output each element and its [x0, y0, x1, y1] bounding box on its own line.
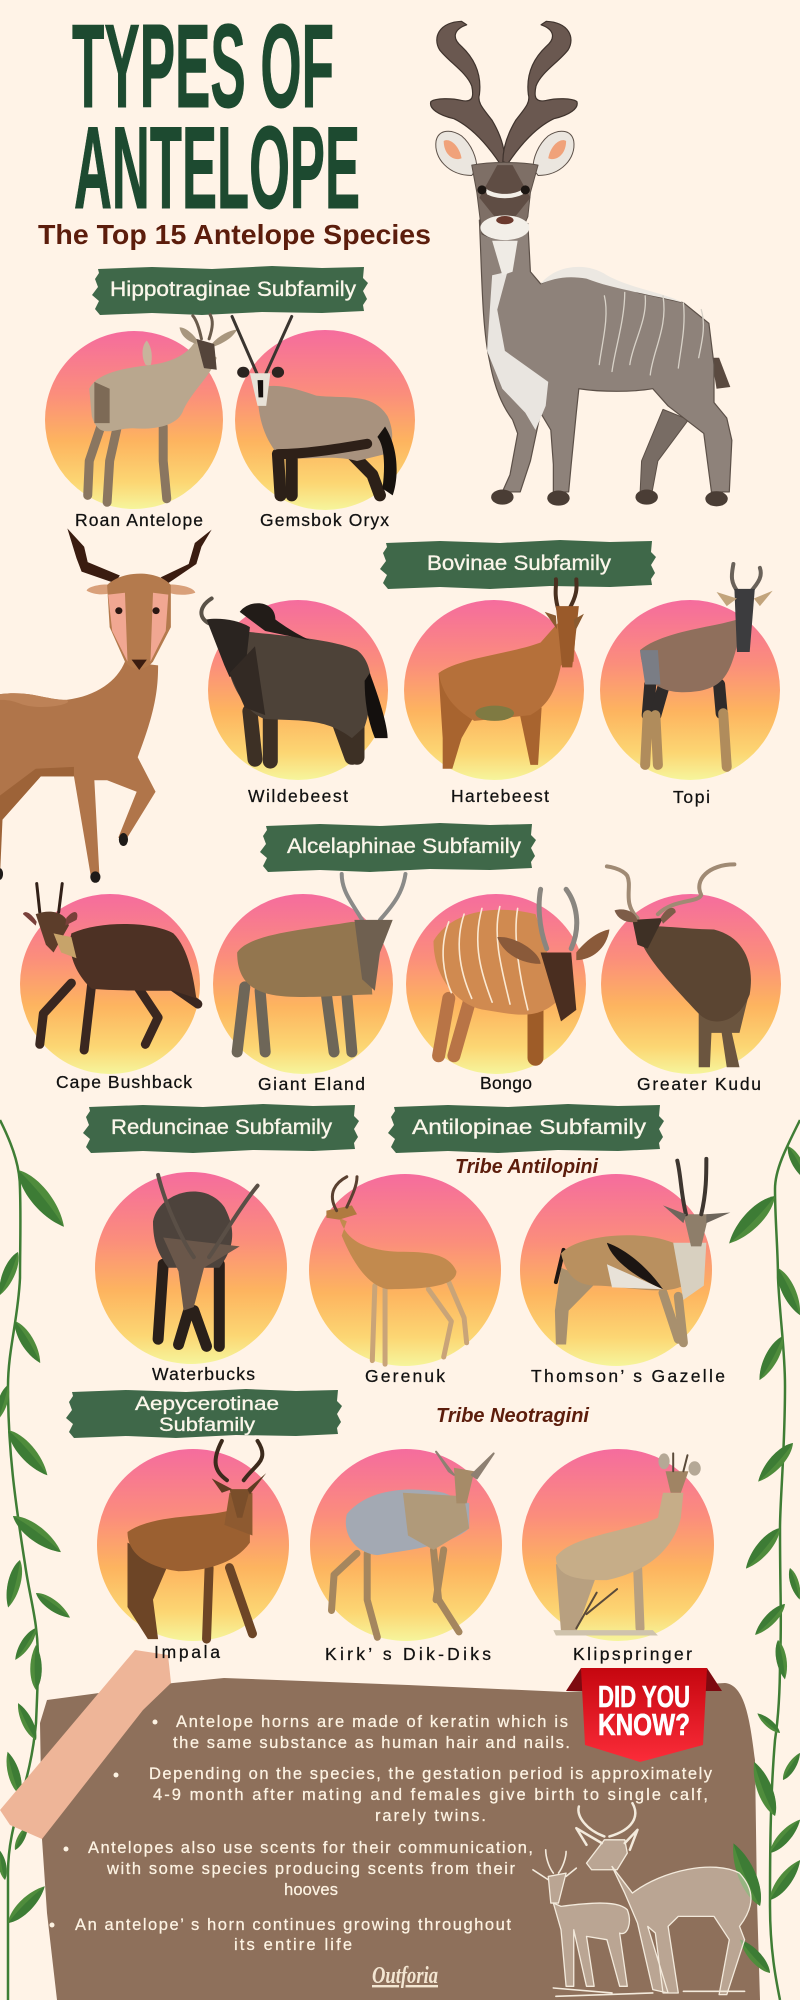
photo: waterbuck [153, 1175, 258, 1346]
infographic canvas: TYPES OF [72, 0, 334, 133]
photo: kirk's dik-dik [332, 1452, 494, 1637]
photo: hartebeest [439, 579, 584, 769]
fact: horn growth [50, 1916, 511, 1954]
photo: thomson's gazelle [555, 1159, 730, 1345]
title [72, 0, 360, 233]
banner: Alcelaphinae Subfamily: Alcelaphinae Subfamily [287, 834, 521, 858]
logo: Outforia: Outforia [372, 1963, 438, 1989]
photo: cape bushback [23, 884, 198, 1050]
fact: scents [64, 1839, 533, 1899]
photo: klipspringer [553, 1453, 701, 1636]
subheading: Tribe Neotragini: Tribe Neotragini [436, 1405, 589, 1427]
fact: gestation: 4-9 month after mating and females give birth to single calf, [153, 1786, 708, 1804]
infographic canvas: ANTELOPE [74, 102, 360, 233]
photo: giant eland [237, 874, 405, 1052]
label: Giant Eland: Giant Eland [258, 1074, 365, 1094]
label: Gemsbok Oryx: Gemsbok Oryx [260, 510, 389, 530]
fact: scents: hooves [284, 1881, 338, 1899]
label: Bongo: Bongo [480, 1073, 532, 1093]
illustration: greater kudu [431, 21, 732, 506]
banner: Bovinae Subfamily: Bovinae Subfamily [427, 551, 611, 575]
circle: wildebeest [208, 600, 388, 780]
subheading: Tribe Antilopini: Tribe Antilopini [455, 1156, 598, 1178]
illustration: line-art antelopes [533, 1803, 751, 1996]
label: Hartebeest: Hartebeest [451, 786, 549, 806]
photo: gerenuk [326, 1177, 467, 1364]
circle: thomson's gazelle [520, 1174, 712, 1366]
photo: topi [640, 564, 773, 767]
panel: did you know background [40, 1678, 760, 2000]
label: Klipspringer: Klipspringer [573, 1644, 692, 1664]
photo: roan antelope [88, 315, 237, 502]
fact: keratin: Antelope horns are made of keratin which is [176, 1713, 568, 1731]
banner: Aepycerotinae Subfamily [66, 1389, 342, 1438]
circle: gemsbok [235, 330, 415, 510]
banner: Bovinae Subfamily [380, 540, 656, 589]
fact: gestation: Depending on the species, the gestation period is approximately [149, 1765, 713, 1783]
label: Thomson's Gazelle: Thomson’ s Gazelle [531, 1366, 725, 1386]
badge: did you know [566, 1668, 722, 1762]
circle: klipspringer [522, 1449, 714, 1641]
photo: greater kudu [607, 864, 751, 1067]
label: Impala: Impala [154, 1642, 220, 1662]
banner: Antilopinae Subfamily: Antilopinae Subfamily [412, 1115, 646, 1139]
subtitle: The Top 15 Antelope Species [38, 219, 431, 250]
vine: right [723, 1120, 800, 2000]
label: Wildebeest: Wildebeest [248, 786, 348, 806]
banner: Alcelaphinae Subfamily [260, 823, 536, 872]
vine: left [0, 1120, 73, 2000]
circle: waterbuck [95, 1172, 287, 1364]
section: Reduncinae and Antilopinae [83, 1104, 730, 1386]
banner: Reduncinae Subfamily: Reduncinae Subfamily [111, 1115, 332, 1139]
circle: greater kudu [601, 894, 781, 1074]
badge: did you know: DID YOU [598, 1679, 690, 1714]
circle: hartebeest [404, 600, 584, 780]
fact: keratin: the same substance as human hair and nails. [173, 1734, 570, 1752]
photo: gemsbok oryx [232, 316, 397, 495]
label: Kirk's Dik-Diks: Kirk’ s Dik-Diks [325, 1644, 491, 1664]
label: Cape Bushback: Cape Bushback [56, 1072, 192, 1092]
banner: Aepycerotinae Subfamily: Subfamily [159, 1415, 256, 1436]
label: Gerenuk: Gerenuk [365, 1366, 445, 1386]
fact: horn growth: its entire life [234, 1936, 352, 1954]
photo: wildebeest [201, 598, 388, 761]
banner: Aepycerotinae Subfamily: Aepycerotinae [135, 1394, 279, 1415]
label: Topi: Topi [673, 787, 710, 807]
fact: scents: Antelopes also use scents for their communication, [88, 1839, 533, 1857]
circle: impala [97, 1449, 289, 1641]
fact: scents: with some species producing scents from their [106, 1860, 516, 1878]
label: Waterbucks: Waterbucks [152, 1364, 255, 1384]
circle: topi [600, 600, 780, 780]
circle: kirk's dik-dik [310, 1449, 502, 1641]
section: Alcelaphinae [20, 823, 781, 1094]
illustration: brown antelope [0, 528, 212, 883]
banner: Hippotraginae Subfamily [92, 266, 368, 315]
fact: gestation [114, 1765, 713, 1825]
circle: roan [45, 331, 223, 509]
circle: giant eland [213, 894, 393, 1074]
circle: cape bushback [20, 894, 200, 1074]
section: Bovinae [201, 540, 780, 807]
fact: keratin [152, 1713, 570, 1752]
circle: bongo [406, 894, 586, 1074]
facts [50, 1713, 713, 1954]
section: Aepycerotinae and Neotragini [66, 1389, 714, 1664]
banner: Hippotraginae Subfamily: Hippotraginae Subfamily [110, 277, 356, 301]
tape [0, 1650, 171, 1839]
circle: gerenuk [309, 1174, 501, 1366]
section: Hippotraginae [45, 266, 415, 530]
label: Greater Kudu: Greater Kudu [637, 1074, 761, 1094]
fact: gestation: rarely twins. [375, 1807, 486, 1825]
banner: Antilopinae Subfamily [388, 1104, 664, 1153]
fact: horn growth: An antelope’ s horn continues growing throughout [75, 1916, 511, 1934]
badge: did you know: KNOW? [598, 1707, 690, 1742]
photo: impala [128, 1441, 266, 1639]
banner: Reduncinae Subfamily [83, 1104, 359, 1153]
label: Roan Antelope: Roan Antelope [75, 510, 203, 530]
photo: bongo [434, 889, 609, 1058]
